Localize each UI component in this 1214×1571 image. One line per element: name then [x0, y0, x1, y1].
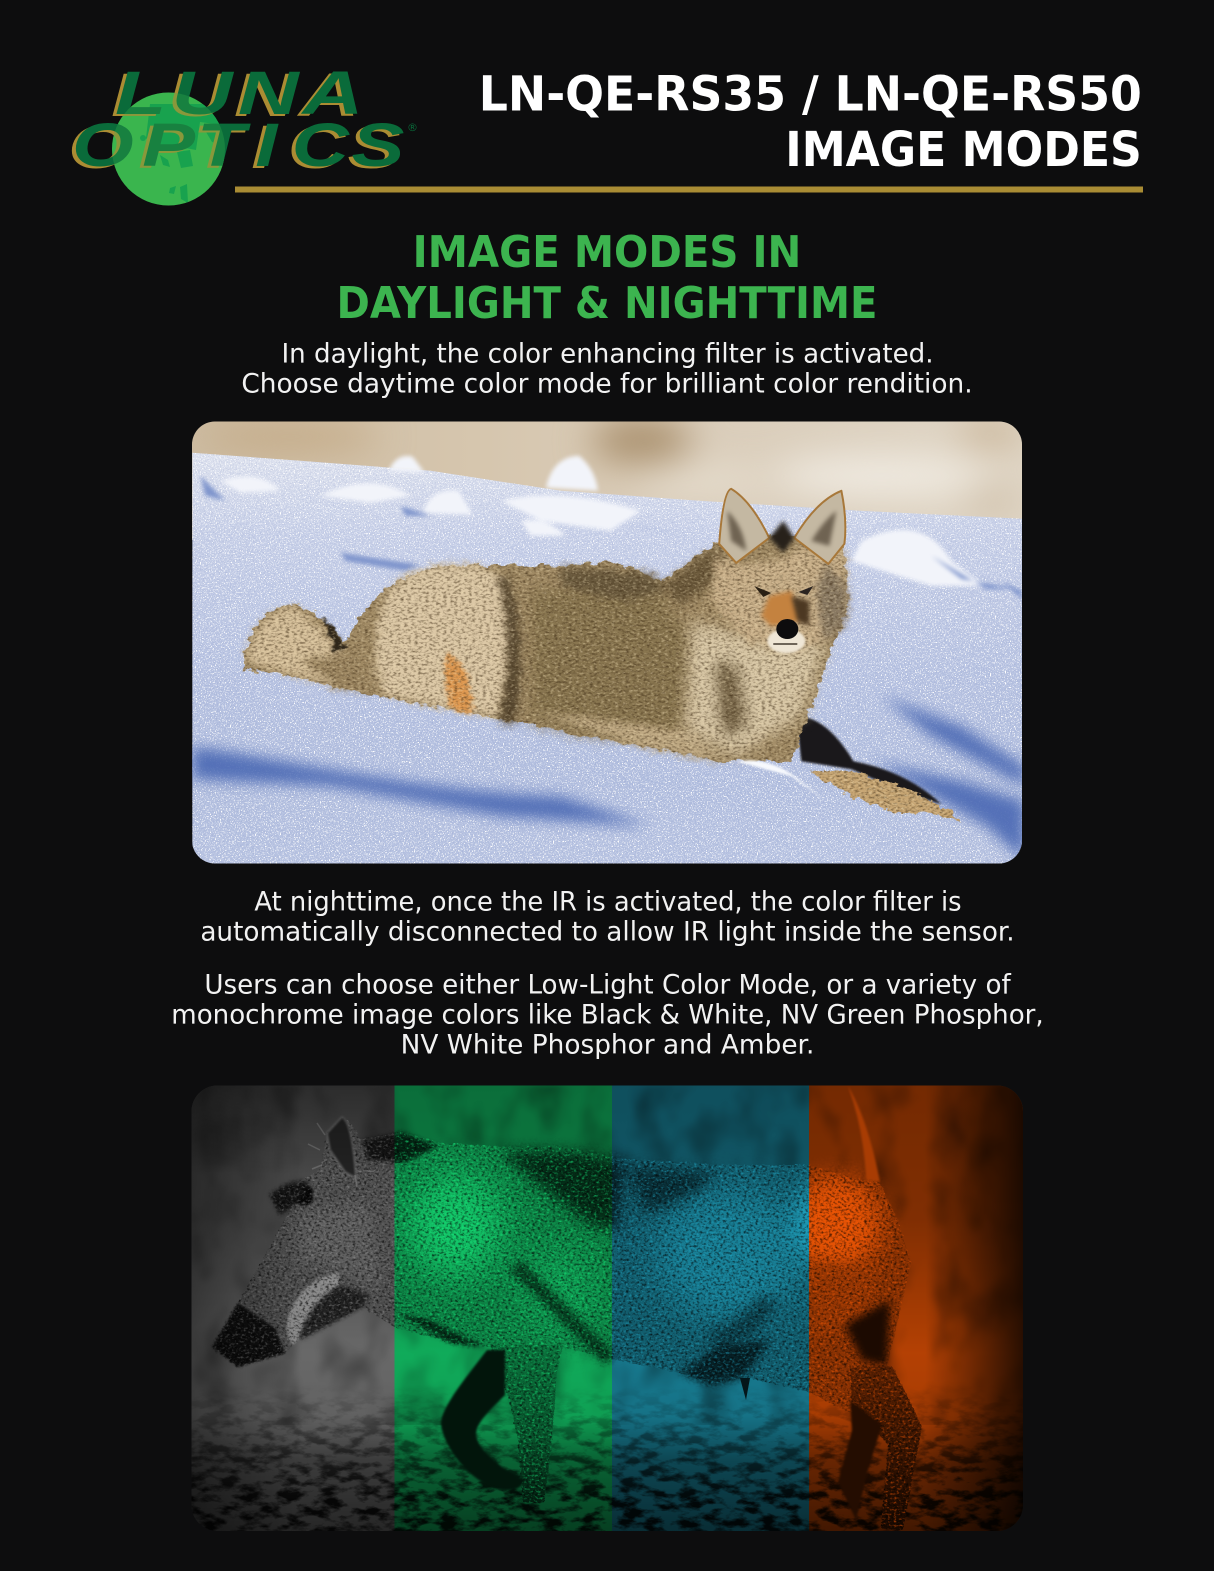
- text block: daylight description: [241, 339, 973, 400]
- text block: nighttime IR description: automatically disconnected to allow IR light inside the sensor.: [200, 917, 1015, 948]
- icon: globe highlight over letters: [112, 92, 225, 206]
- text block: nighttime IR description: At nighttime, once the IR is activated, the color filter is: [254, 886, 962, 917]
- coyote: shadow leg: [796, 716, 942, 804]
- strip: white phosphor cyan: [612, 1086, 809, 1531]
- logo registered mark: ®: [407, 121, 418, 134]
- strip: amber: [809, 1086, 1023, 1531]
- text block: daylight description: Choose daytime color mode for brilliant color rendition.: [241, 369, 973, 400]
- header rule: [235, 186, 1143, 192]
- photo: warthog in four night vision modes: [191, 1085, 1024, 1532]
- strip: green phosphor: [394, 1086, 612, 1531]
- photo: coyote on snow in daylight color mode: [190, 417, 1026, 867]
- text block: nighttime IR description: [200, 886, 1015, 948]
- strip: black and white: [192, 1086, 394, 1531]
- snow mounds: [220, 456, 987, 586]
- heading: image modes in daylight and nighttime: IMAGE MODES IN: [413, 227, 801, 278]
- logo wordmark: OPTICS: OPTICS: [68, 113, 400, 181]
- heading: image modes in daylight and nighttime: [337, 227, 877, 329]
- text block: monochrome modes: Users can choose either Low-Light Color Mode, or a variety of: [204, 970, 1012, 1001]
- coyote: body: [243, 536, 848, 761]
- title: LN-QE-RS35 / LN-QE-RS50: [479, 67, 1142, 123]
- logo wordmark: OPTICS: OPTICS: [72, 111, 404, 179]
- title: IMAGE MODES: [785, 122, 1142, 178]
- logo wordmark: LUNA: LUNA: [111, 60, 359, 129]
- coyote: front paw: [809, 771, 962, 821]
- text block: monochrome modes: [171, 970, 1044, 1061]
- text block: monochrome modes: monochrome image colors like Black & White, NV Green Phosphor,: [171, 1000, 1044, 1031]
- heading: image modes in daylight and nighttime: DAYLIGHT & NIGHTTIME: [337, 278, 877, 329]
- logo wordmark: LUNA: LUNA: [115, 58, 363, 127]
- coyote: face: [761, 591, 801, 626]
- coyote: ears: [719, 489, 769, 563]
- title: [479, 67, 1142, 178]
- text block: monochrome modes: NV White Phosphor and Amber.: [401, 1030, 814, 1061]
- icon: green globe: [112, 92, 228, 206]
- logo: Luna Optics: [72, 72, 416, 206]
- text block: daylight description: In daylight, the color enhancing filter is activated.: [281, 339, 934, 370]
